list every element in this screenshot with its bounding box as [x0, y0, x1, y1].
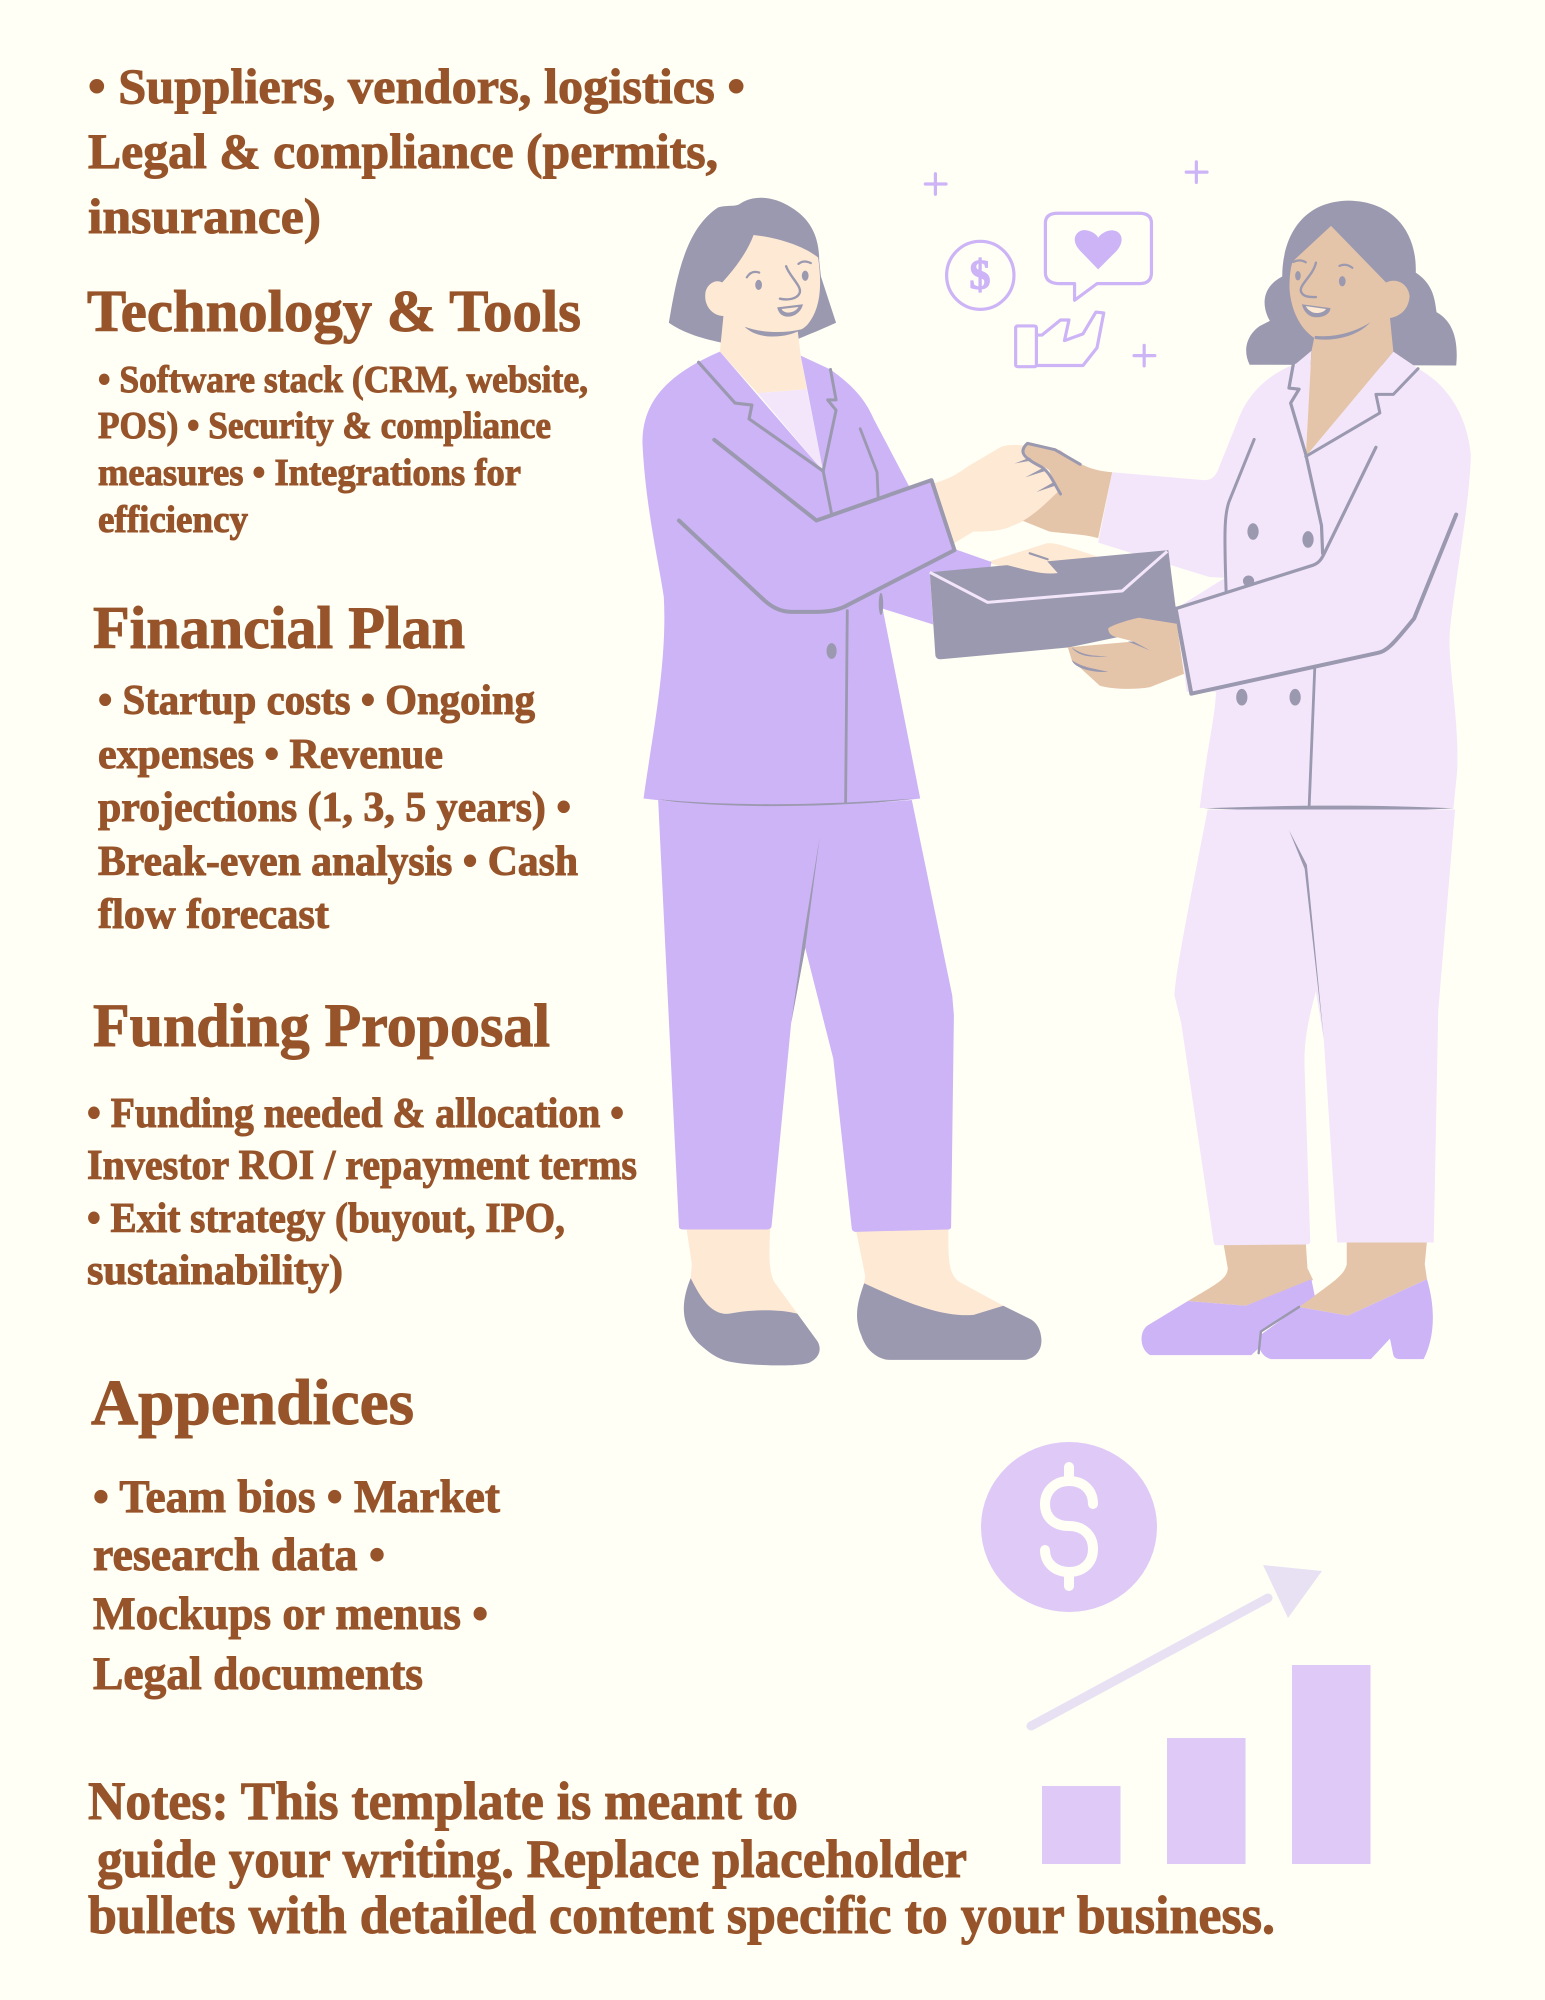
right trouser crease	[1289, 830, 1324, 1039]
left woman hair	[669, 198, 836, 344]
text block: appendices bullets: Mockups or menus •	[93, 1588, 488, 1640]
text block: financial bullets	[98, 678, 578, 938]
left woman trousers	[658, 800, 954, 1232]
left woman shoes	[684, 1278, 1041, 1365]
text block: operations bullets: • Suppliers, vendors, logistics •	[88, 58, 745, 114]
text block: funding bullets: Investor ROI / repayment terms	[87, 1143, 637, 1189]
text block: technology bullets: • Software stack (CRM, website,	[98, 359, 588, 401]
text block: appendices bullets: • Team bios • Market	[93, 1471, 500, 1523]
left woman neck and chest	[720, 312, 807, 393]
left woman forearm skin, upper hand	[931, 445, 1061, 543]
right woman lower hand holding envelope	[1068, 618, 1184, 689]
left woman face	[705, 235, 820, 336]
right woman trousers	[1174, 810, 1455, 1245]
text block: notes	[88, 1771, 1275, 1945]
text block: notes: bullets with detailed content specific to your business.	[88, 1885, 1275, 1945]
text block: appendices bullets	[93, 1471, 500, 1700]
text block: technology bullets: efficiency	[98, 499, 248, 541]
text block: notes: guide your writing. Replace placeholder	[97, 1829, 967, 1889]
right woman jacket seams	[1176, 364, 1456, 811]
arrow: rising trend	[1031, 1565, 1322, 1726]
left trouser crease	[791, 836, 820, 1023]
text block: funding bullets	[87, 1091, 637, 1294]
right woman face and neck	[1290, 226, 1410, 456]
legs	[658, 800, 1455, 1365]
right woman features	[1293, 260, 1370, 340]
icon: open hand	[1016, 312, 1104, 367]
icon: large dollar coin	[981, 1442, 1157, 1612]
text block: funding bullets: • Funding needed & allocation •	[87, 1091, 624, 1137]
right woman upper hand	[1023, 445, 1112, 538]
text block: operations bullets	[88, 58, 745, 244]
left woman jacket seams	[658, 362, 954, 808]
text block: financial bullets: Break-even analysis • Cash	[98, 839, 578, 885]
text block: financial bullets: expenses • Revenue	[98, 732, 443, 778]
text block: technology bullets: measures • Integrations for	[98, 452, 521, 494]
text block: appendices bullets: Legal documents	[93, 1648, 423, 1700]
text block: financial bullets: • Startup costs • Ongoing	[98, 678, 535, 724]
thumb of left woman over envelope	[1002, 553, 1058, 573]
chart icon: growth bars, arrow and coin	[981, 1442, 1370, 1864]
heading: Funding Proposal: Funding Proposal	[93, 993, 550, 1060]
text block: operations bullets: Legal & compliance (permits,	[88, 123, 718, 179]
figure: right woman	[1015, 201, 1471, 811]
text block: financial bullets: flow forecast	[98, 892, 329, 938]
text block: financial bullets: projections (1, 3, 5 years) •	[98, 785, 571, 831]
right woman finger lines	[1015, 443, 1080, 494]
right woman shoes	[1142, 1279, 1433, 1359]
heading: Technology & Tools: Technology & Tools	[87, 278, 581, 344]
text block: funding bullets: sustainability)	[87, 1248, 343, 1294]
left woman ankles	[686, 1227, 1003, 1315]
text block: operations bullets: insurance)	[88, 188, 321, 244]
envelope	[930, 550, 1178, 659]
figure: left woman	[642, 198, 1097, 808]
text block: notes: Notes: This template is meant to	[88, 1771, 798, 1831]
text block: appendices bullets: research data •	[93, 1529, 385, 1581]
text block: technology bullets	[98, 359, 588, 541]
right woman ankles	[1188, 1241, 1427, 1316]
icon: dollar sign in coin: $	[970, 253, 990, 299]
left woman jacket	[642, 352, 992, 806]
right woman hair	[1246, 201, 1457, 365]
bar chart	[1042, 1665, 1370, 1864]
left woman features	[745, 261, 811, 337]
text block: technology bullets: POS) • Security & compliance	[98, 405, 551, 447]
icon: dollar coin outline	[947, 241, 1014, 309]
text block: funding bullets: • Exit strategy (buyout, IPO,	[87, 1196, 565, 1242]
illustration: two women exchanging an envelope	[642, 162, 1471, 1365]
left woman lower hand	[988, 543, 1097, 569]
icon: speech bubble with heart	[1045, 213, 1151, 300]
heading: Appendices: Appendices	[91, 1367, 414, 1439]
icons: floating plus signs	[925, 162, 1207, 366]
heading: Financial Plan: Financial Plan	[93, 595, 465, 661]
right woman jacket	[1098, 351, 1471, 809]
left woman shirt	[757, 389, 823, 471]
